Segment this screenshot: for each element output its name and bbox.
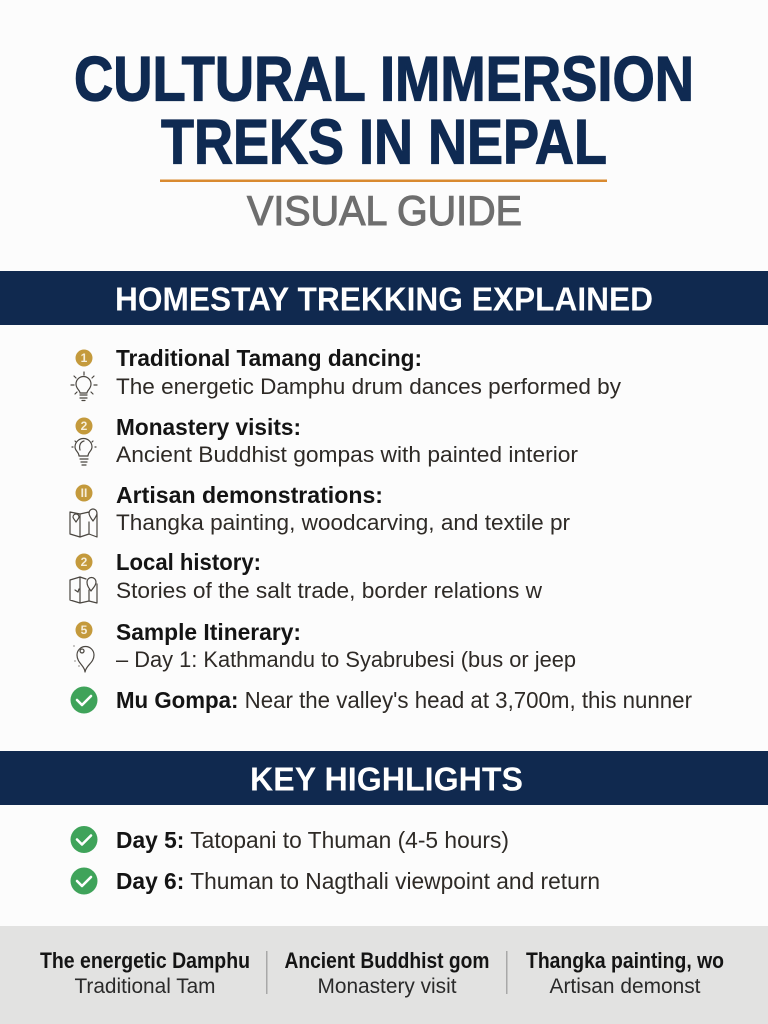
icon: light bulb <box>71 372 97 400</box>
item 3 heading: Artisan demonstrations: <box>116 482 383 508</box>
check item: Mu Gompa <box>70 686 692 714</box>
footer column 2 <box>284 948 490 998</box>
number badge 2 <box>76 418 92 434</box>
footer column 2: Monastery visit <box>318 974 457 998</box>
list item 2 <box>72 414 579 467</box>
number badge 3: II <box>81 486 87 500</box>
Mu Gompa text: Mu Gompa: Near the valley's head at 3,700m, this nunner <box>116 687 692 713</box>
item 1 text: The energetic Damphu drum dances performed by <box>116 374 622 399</box>
number badge 4 <box>76 554 92 570</box>
number badge 2: 2 <box>81 419 88 433</box>
number badge 5 <box>76 622 92 638</box>
footer column 3 <box>526 948 724 998</box>
section banner: homestay trekking explained <box>0 271 768 325</box>
number badge 1 <box>76 350 92 366</box>
title underline <box>160 180 607 182</box>
title <box>74 44 694 178</box>
icon: map with pins <box>70 509 97 537</box>
footer column 3: Artisan demonst <box>550 974 701 998</box>
item 4 heading: Local history: <box>116 549 261 575</box>
check item: Day 5 <box>70 826 509 853</box>
item 4 text: Stories of the salt trade, border relations w <box>116 578 543 603</box>
item 5 text: – Day 1: Kathmandu to Syabrubesi (bus or jeep <box>116 647 576 672</box>
list item 4 <box>70 549 543 603</box>
icon: map pin <box>74 646 94 672</box>
icon: green check <box>70 868 98 894</box>
item 1 heading: Traditional Tamang dancing: <box>116 345 422 371</box>
Day 5 text: Day 5: Tatopani to Thuman (4-5 hours) <box>116 827 509 853</box>
item 2 text: Ancient Buddhist gompas with painted interior <box>116 442 579 467</box>
number badge 3 <box>76 484 92 502</box>
list item 3 <box>70 482 571 537</box>
icon: green check <box>70 826 98 853</box>
list item 1 <box>71 345 622 400</box>
footer strip <box>0 926 768 1024</box>
number badge 1: 1 <box>81 351 88 365</box>
title: TREKS IN NEPAL <box>161 108 607 178</box>
section banner: key highlights <box>0 751 768 805</box>
icon: green check <box>70 686 98 714</box>
item 5 heading: Sample Itinerary: <box>116 619 301 645</box>
item 3 text: Thangka painting, woodcarving, and textile pr <box>116 510 571 535</box>
footer column 2: Ancient Buddhist gom <box>284 948 490 973</box>
list item 5 <box>74 619 576 672</box>
number badge 4: 2 <box>81 555 88 569</box>
section banner: homestay trekking explained: HOMESTAY TREKKING EXPLAINED <box>115 280 653 318</box>
number badge 5: 5 <box>81 623 88 637</box>
footer column 1 <box>40 948 250 998</box>
item 2 heading: Monastery visits: <box>116 414 301 440</box>
footer column 3: Thangka painting, wo <box>526 948 724 973</box>
check item: Day 6 <box>70 868 600 894</box>
icon: light bulb <box>72 438 96 465</box>
Day 6 text: Day 6: Thuman to Nagthali viewpoint and return <box>116 868 600 894</box>
footer column 1: Traditional Tam <box>74 974 216 998</box>
icon: folded map <box>70 577 97 603</box>
subtitle: VISUAL GUIDE <box>247 187 522 234</box>
section banner: key highlights: KEY HIGHLIGHTS <box>250 760 523 798</box>
footer column 1: The energetic Damphu <box>40 948 250 973</box>
